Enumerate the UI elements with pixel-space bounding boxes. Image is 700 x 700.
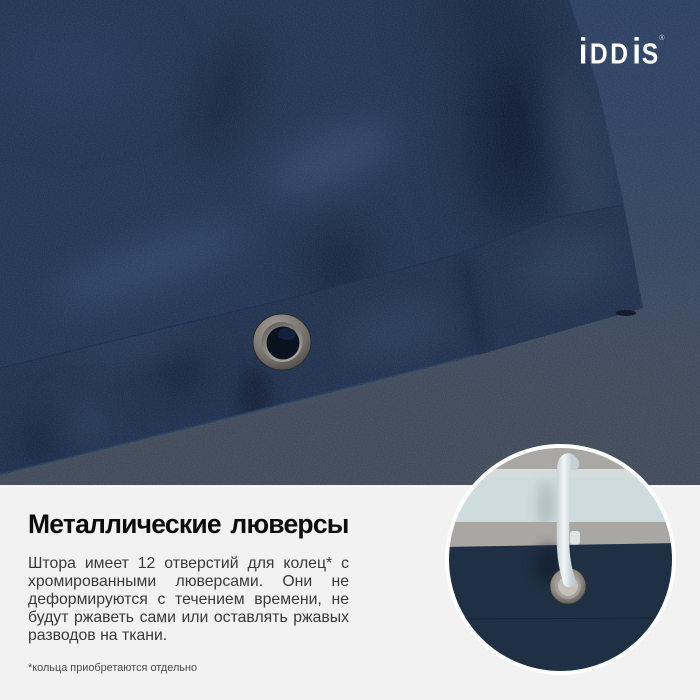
logo: iddis: D	[590, 38, 608, 70]
title: Металлические люверсы	[28, 509, 349, 539]
clip under rail	[570, 531, 580, 545]
inset circle frame	[445, 444, 676, 675]
logo: iddis: D	[610, 38, 628, 70]
background surface behind the fabric	[0, 0, 700, 490]
grey lower rail	[440, 522, 680, 548]
grain texture	[0, 0, 700, 490]
ring shadow on rail	[538, 481, 554, 529]
eyelet	[253, 314, 311, 370]
navy curtain	[449, 543, 672, 671]
curtain seam	[460, 618, 660, 619]
logo: iddis	[579, 32, 665, 72]
white ring hook	[563, 459, 573, 581]
seam stitch line	[0, 205, 623, 368]
text block: description: разводов на ткани.	[28, 627, 167, 644]
text block: description: Штора имеет 12 отверстий для колец* с	[28, 555, 349, 572]
text block: description: будут ржаветь сами или оставлять ржавых	[28, 609, 349, 626]
photo: navy curtain fabric with eyelet	[0, 0, 700, 485]
logo: iddis: i	[579, 32, 587, 72]
ceiling band	[492, 448, 630, 472]
fabric shape with folds	[0, 0, 643, 475]
fold shadow	[536, 547, 560, 583]
grommet	[550, 568, 586, 604]
inset photo: ring through eyelet	[445, 444, 676, 675]
logo: iddis: ®	[659, 34, 665, 42]
text block: description	[28, 555, 349, 644]
logo: iddis: S	[642, 38, 658, 70]
hem corner fold shadow	[616, 310, 636, 316]
rail highlight	[484, 469, 636, 478]
logo: iddis: i	[632, 32, 641, 72]
footnote: *кольца приобретаются отдельно	[28, 662, 197, 674]
panel: bottom text panel	[0, 485, 700, 700]
text block: description: деформируются с течением времени, не	[28, 591, 349, 608]
text block: description: хромированными люверсами. Они не	[28, 573, 349, 590]
pale rail	[455, 478, 666, 523]
